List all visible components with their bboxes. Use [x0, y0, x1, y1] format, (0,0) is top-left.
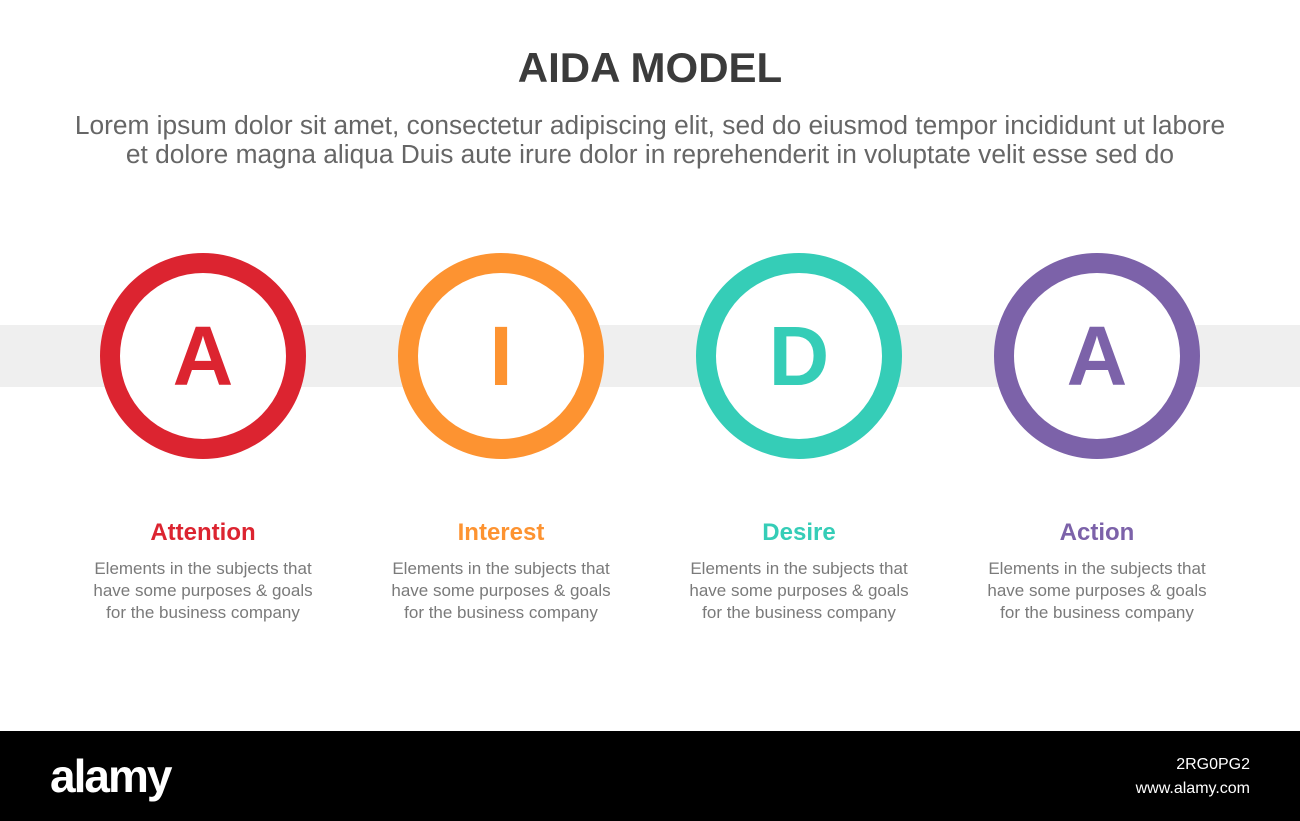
- subtitle: [75, 110, 1225, 169]
- text: desire: Desire: [762, 519, 836, 546]
- text: attention: Elements in the subjects that: [94, 559, 312, 578]
- subtitle: Lorem ipsum dolor sit amet, consectetur adipiscing elit, sed do eiusmod tempor incididunt ut labore: [75, 110, 1225, 140]
- text: interest: [391, 519, 611, 622]
- text: attention: for the business company: [106, 603, 300, 622]
- footer ids: 2RG0PG2: [1176, 756, 1250, 773]
- circle D desire: D: [769, 308, 829, 402]
- circle A attention: [100, 253, 306, 459]
- circle A action: [994, 253, 1200, 459]
- footer ids: www.alamy.com: [1136, 780, 1250, 797]
- text: desire: Elements in the subjects that: [690, 559, 908, 578]
- subtitle: et dolore magna aliqua Duis aute irure dolor in reprehenderit in voluptate velit esse sed do: [126, 139, 1174, 169]
- text: desire: have some purposes & goals: [689, 581, 909, 600]
- text: interest: have some purposes & goals: [391, 581, 611, 600]
- circle I interest: [398, 253, 604, 459]
- text: interest: Elements in the subjects that: [392, 559, 610, 578]
- circle A action: A: [1067, 308, 1127, 402]
- text: desire: for the business company: [702, 603, 896, 622]
- text: action: [987, 519, 1207, 622]
- title: AIDA MODEL: [518, 44, 782, 91]
- text: action: Action: [1060, 519, 1134, 546]
- text: attention: [93, 519, 313, 622]
- circle I interest: I: [489, 308, 513, 402]
- footer bar: [0, 731, 1300, 821]
- text: action: have some purposes & goals: [987, 581, 1207, 600]
- footer logo: alamy: [50, 750, 170, 802]
- text: action: Elements in the subjects that: [988, 559, 1206, 578]
- text: desire: [689, 519, 909, 622]
- footer ids: [1136, 756, 1250, 797]
- gray band: [0, 325, 1300, 387]
- text: attention: Attention: [150, 519, 256, 546]
- circle D desire: [696, 253, 902, 459]
- circle A attention: A: [173, 308, 233, 402]
- text: action: for the business company: [1000, 603, 1194, 622]
- text: attention: have some purposes & goals: [93, 581, 313, 600]
- text: interest: for the business company: [404, 603, 598, 622]
- text: interest: Interest: [458, 519, 544, 546]
